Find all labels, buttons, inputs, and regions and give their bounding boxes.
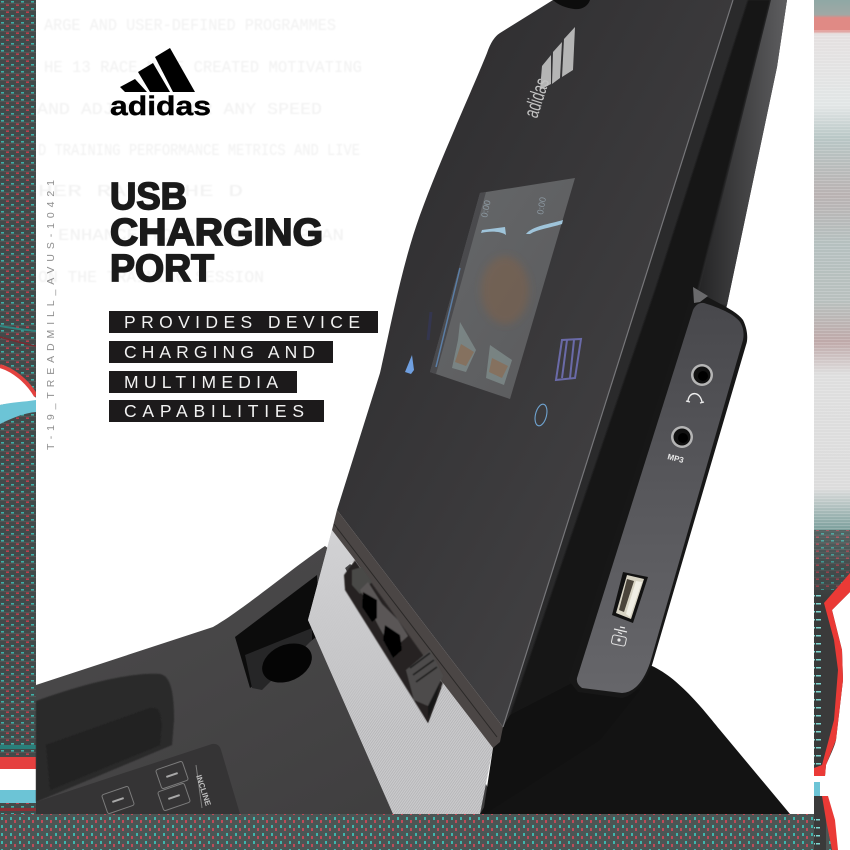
USB port <box>612 572 648 623</box>
title: USB charging port: CHARGING <box>110 212 323 254</box>
subtitle label bars: MULTIMEDIA <box>124 372 278 392</box>
subtitle label bars <box>109 311 378 422</box>
faded background spec text: HER RATE THE D <box>38 183 243 202</box>
title: USB charging port <box>110 176 323 290</box>
headphone jack <box>691 364 713 386</box>
USB and charge icons <box>611 627 627 646</box>
MP3 label: MP3 <box>667 452 685 465</box>
right band red and white shape <box>814 573 850 850</box>
adidas logo <box>110 48 211 121</box>
console front face <box>337 0 733 727</box>
side port panel <box>577 303 744 693</box>
lower shroud <box>36 546 500 814</box>
silver speaker grille <box>308 530 493 814</box>
console display screen: 0:00 <box>535 196 548 215</box>
subtitle label bars: PROVIDES DEVICE <box>124 312 360 332</box>
black lower housing <box>483 680 640 814</box>
title: USB charging port: USB <box>110 176 187 218</box>
faded background spec text: ARGE AND USER-DEFINED PROGRAMMES <box>44 17 336 36</box>
subtitle label bars: CAPABILITIES <box>124 401 304 421</box>
vertical product code: T-19_TREADMILL_AVUS-10421 <box>45 180 57 450</box>
keypad: INCLINE <box>194 774 213 808</box>
faded background spec text: HE 13 RACE MODE CREATED MOTIVATING <box>44 59 362 78</box>
faded background spec text <box>37 17 362 288</box>
console display screen <box>430 178 575 399</box>
logo three bars <box>120 48 195 92</box>
top handle clip <box>553 0 590 9</box>
logo wordmark: adidas <box>110 91 211 121</box>
subtitle label bars: CHARGING AND <box>124 342 315 362</box>
face edge highlight <box>503 0 733 727</box>
faded background spec text: ENHANCE YOUR WORKOUT PLAN <box>58 227 344 246</box>
storage tray <box>36 674 174 802</box>
rear housing dark band <box>503 0 787 727</box>
knob control strip <box>344 560 443 723</box>
console adidas mark <box>520 27 575 121</box>
title: USB charging port: PORT <box>110 248 214 290</box>
headphone icon <box>686 394 704 403</box>
frame spike highlight <box>693 287 708 303</box>
console display screen: 0:00 <box>479 199 493 218</box>
left band glitch stripes <box>0 326 36 811</box>
faded background spec text: ON THE TRAINING SESSION <box>38 269 264 288</box>
side port panel outer frame <box>568 287 747 698</box>
MP3 jack <box>671 426 693 448</box>
bottom trim strip <box>332 510 503 748</box>
faded background spec text: AND ADJUSTED FOR ANY SPEED <box>37 101 322 120</box>
dark channel beside face <box>510 0 770 730</box>
keypad <box>36 744 240 814</box>
console touch indicators <box>405 312 581 427</box>
cup holder <box>235 575 320 690</box>
rear stand base <box>480 662 790 814</box>
faded background spec text: D TRAINING PERFORMANCE METRICS AND LIVE <box>38 142 360 161</box>
rear housing grey flank <box>697 0 787 305</box>
console adidas mark: adidas <box>520 75 554 121</box>
